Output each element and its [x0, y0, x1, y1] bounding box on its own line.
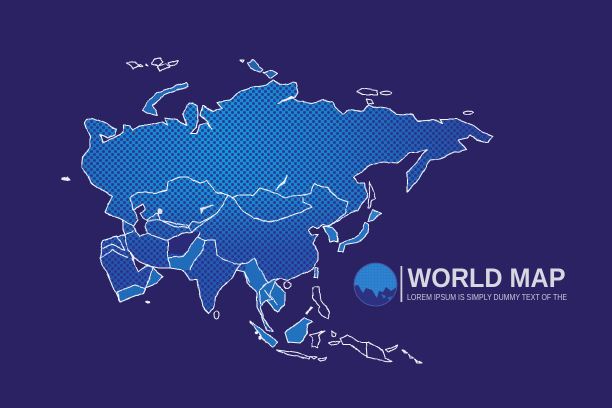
island: Lesser Sunda: [310, 356, 327, 361]
coast outline: [82, 80, 493, 332]
island: Palawan: [307, 307, 312, 313]
island: Novaya Zemlya: [143, 83, 188, 115]
region: Central Asia bright: [145, 220, 192, 240]
region: Pakistan bright: [168, 237, 205, 270]
icon: globe: [354, 262, 398, 306]
region: Afghanistan dark: [168, 232, 200, 255]
island: Halmahera: [332, 331, 336, 336]
Aral Sea and Lake Balkhash: [158, 205, 214, 214]
island: Franz Josef Land: [127, 58, 178, 71]
panel: southern darker tone: [100, 206, 340, 320]
island: Seram: [328, 341, 340, 345]
island: Taiwan: [314, 268, 318, 278]
island: Solomon chain: [402, 350, 422, 363]
island: Wrangel: [464, 111, 474, 115]
border: Indochina: [265, 278, 280, 305]
title: WORLD MAP: [408, 263, 566, 293]
border: Caucasus and Turkey: [123, 220, 133, 250]
island: Borneo: [285, 317, 312, 343]
island: small west dot: [62, 177, 70, 180]
border: Central Asia: [147, 220, 192, 240]
region: Yemen and Oman bright: [117, 268, 163, 302]
island: Hainan: [284, 282, 290, 288]
islands: [62, 58, 474, 363]
border: Iran and Afghanistan: [168, 232, 205, 270]
island: New Guinea: [340, 335, 392, 362]
border: Kazakhstan: [130, 177, 228, 228]
island: Severnaya Zemlya: [240, 60, 277, 78]
globe land: [354, 262, 398, 300]
island: Sulawesi: [310, 331, 325, 348]
region: Myanmar: [243, 258, 268, 305]
border: Mongolia: [220, 184, 348, 225]
land fills: [82, 80, 493, 332]
region: Thailand and Indochina: [260, 278, 285, 312]
Caspian Sea: [133, 205, 148, 236]
island: Honshu: [338, 223, 369, 252]
infographic canvas: [61, 57, 567, 364]
map outlines of Asia: [62, 58, 493, 363]
island: Java: [277, 350, 310, 359]
peninsula: Korea: [323, 227, 338, 242]
Lake Baikal: [275, 175, 288, 190]
border: western China: [192, 205, 223, 237]
subtitle: LOREM IPSUM IS SIMPLY DUMMY TEXT OF THE: [407, 292, 567, 302]
halftone dots: [82, 80, 493, 332]
country borders: [100, 177, 348, 305]
border: India and Nepal: [205, 240, 268, 305]
Persian Gulf: [133, 257, 147, 272]
border: Arabia: [100, 236, 153, 302]
island: Hokkaido: [368, 210, 381, 222]
island: New Britain: [385, 345, 398, 352]
divider: [400, 266, 402, 302]
island: Philippines: [313, 287, 330, 319]
island: small south dot: [146, 302, 150, 304]
island: Sri Lanka: [214, 311, 219, 319]
island: Sumatra: [250, 321, 278, 347]
globe islands: [381, 294, 392, 300]
island: New Siberian: [357, 88, 377, 95]
island: Sakhalin: [368, 182, 376, 208]
land fill with gradient: [82, 80, 493, 332]
